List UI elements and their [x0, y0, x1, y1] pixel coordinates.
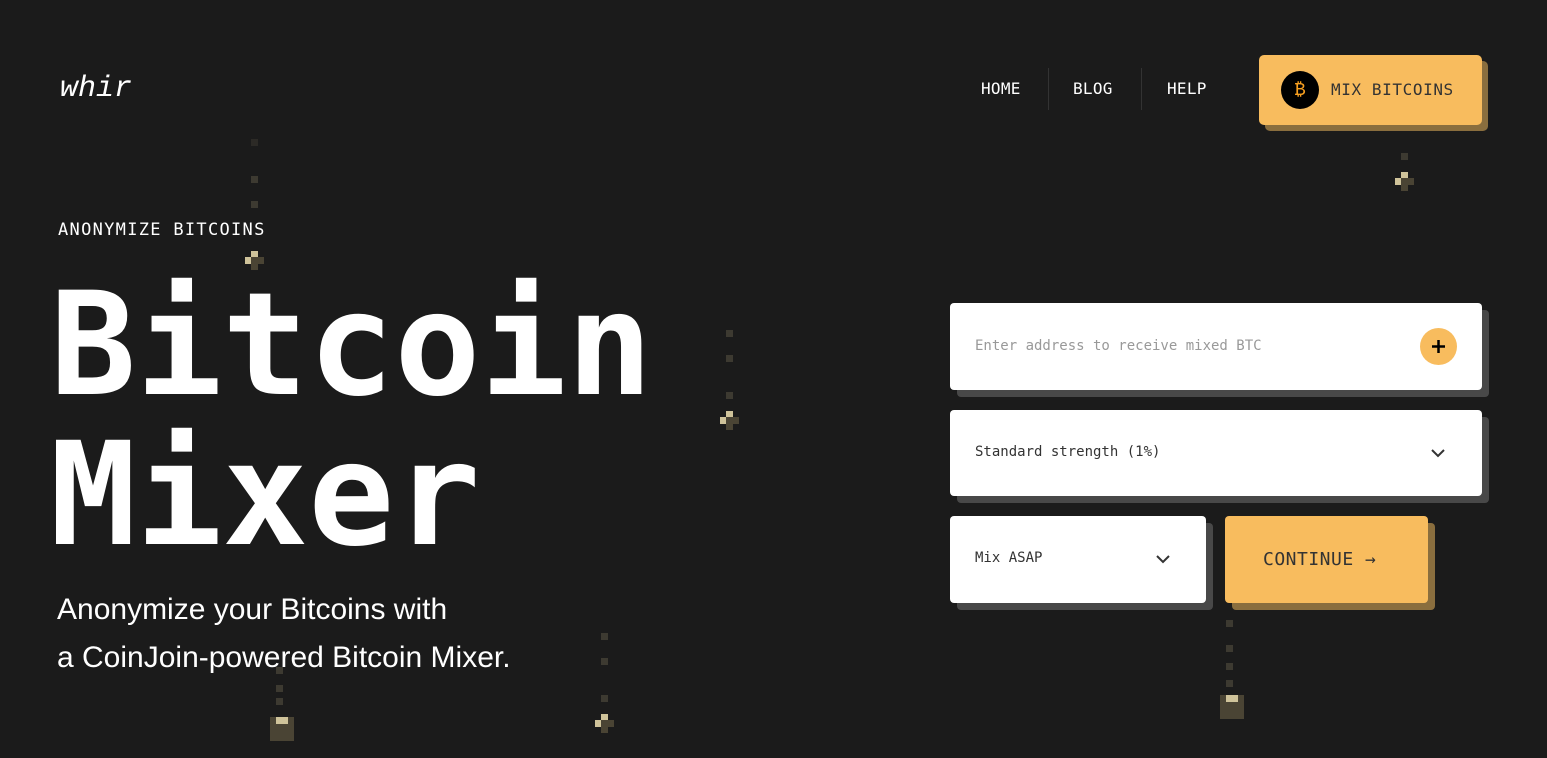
title — [50, 261, 653, 578]
subtitle: a CoinJoin-powered Bitcoin Mixer. — [57, 641, 511, 674]
button: mix bitcoins — [1259, 55, 1482, 125]
title: Mixer — [50, 411, 480, 578]
form: address input: Enter address to receive mixed BTC — [975, 338, 1262, 354]
form: address input — [950, 303, 1482, 390]
icon: bitcoin — [1281, 71, 1319, 109]
decorative pixels — [251, 139, 258, 146]
title: Bitcoin — [50, 261, 653, 428]
button: continue — [1225, 516, 1428, 603]
button: mix bitcoins: MIX BITCOINS — [1331, 80, 1454, 99]
nav: home: HOME — [981, 79, 1021, 98]
form: timing select: Mix ASAP — [975, 550, 1042, 566]
icon: bitcoin: ₿ — [1295, 79, 1305, 100]
nav: help: HELP — [1167, 79, 1207, 98]
subtitle: Anonymize your Bitcoins with — [57, 593, 447, 626]
subtitle — [57, 593, 511, 674]
logo: whir — [60, 72, 132, 106]
form: strength select — [950, 410, 1482, 496]
eyebrow: ANONYMIZE BITCOINS — [58, 220, 266, 240]
button: continue: CONTINUE → — [1263, 549, 1376, 570]
nav: blog: BLOG — [1073, 79, 1113, 98]
icon: plus — [1420, 328, 1457, 365]
form: strength select: Standard strength (1%) — [975, 444, 1160, 460]
form: timing select — [950, 516, 1206, 603]
